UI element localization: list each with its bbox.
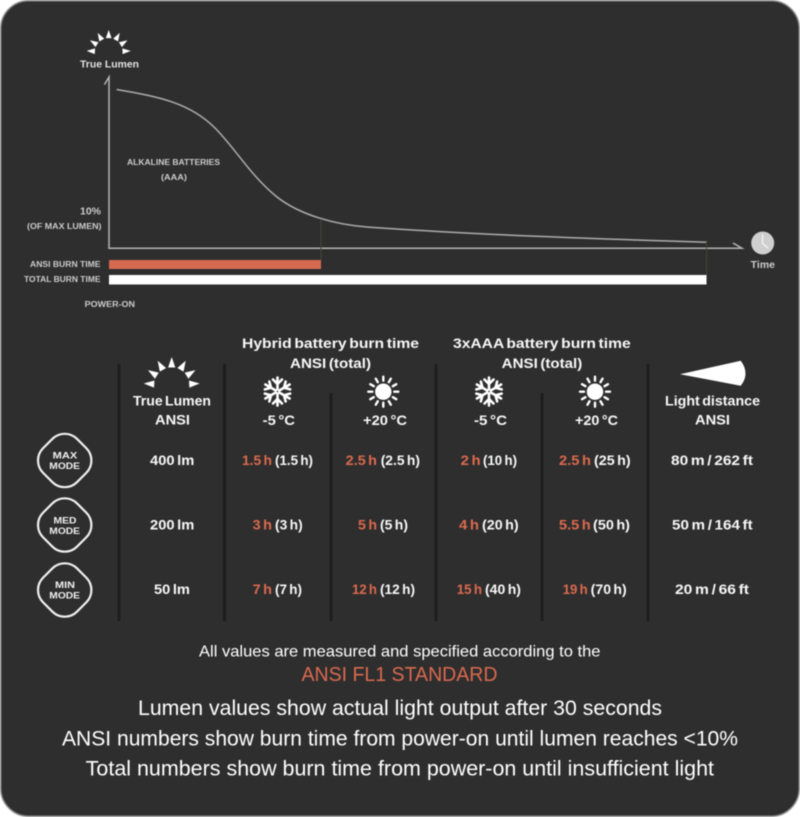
row: med mode values: (50 h) [593, 516, 630, 532]
row: max mode values: 2 h [461, 452, 481, 468]
row: max mode values: 2.5 h [559, 452, 591, 468]
row: med mode values: (5 h) [380, 516, 408, 532]
badge: med mode: MED [54, 516, 77, 526]
row: min mode values: 19 h [563, 581, 588, 597]
row: med mode values: 50 m / 164 ft [672, 516, 753, 532]
icon: snowflake hybrid [263, 378, 292, 406]
heading: hybrid battery: Hybrid battery burn time [242, 335, 419, 351]
row: med mode values: 4 h [459, 516, 479, 532]
badge: med mode [31, 491, 99, 559]
row: max mode values: (25 h) [594, 452, 631, 468]
row: min mode values: 12 h [352, 581, 377, 597]
heading: 3xAAA battery [453, 335, 631, 371]
icon: sun hybrid [368, 377, 398, 407]
row: med mode values: (3 h) [275, 516, 303, 532]
chart label: ten percent: (OF MAX LUMEN) [27, 222, 102, 231]
row: max mode values: (2.5 h) [381, 452, 420, 468]
row: max mode values: 400 lm [150, 452, 194, 468]
y axis label: True Lumen [80, 60, 139, 70]
row: max mode values: 1.5 h [242, 452, 272, 468]
heading: 3xAAA battery: 3xAAA battery burn time [453, 335, 631, 351]
bar: total burn time [109, 275, 706, 284]
row: min mode values: 7 h [253, 581, 272, 597]
column head: hybrid cold: -5 °C [263, 412, 295, 428]
discharge curve [117, 90, 707, 242]
specification table [31, 335, 760, 624]
icon: lumen sun [144, 357, 200, 388]
bar: ansi burn time [109, 260, 321, 269]
row: min mode values: (7 h) [275, 581, 302, 597]
standard name: ANSI FL1 STANDARD [302, 664, 498, 686]
column head: true lumen [133, 392, 211, 428]
badge: min mode: MODE [49, 590, 80, 602]
axes [104, 77, 742, 248]
row: max mode values: (1.5 h) [275, 452, 313, 468]
badge: med mode: MODE [49, 526, 80, 537]
chart label: alkaline batteries: (AAA) [161, 173, 187, 182]
chart label: ten percent: 10% [80, 206, 101, 218]
heading: 3xAAA battery: ANSI (total) [502, 355, 582, 371]
column head: true lumen: True Lumen [133, 392, 211, 408]
label: total burn time: TOTAL BURN TIME [24, 275, 101, 284]
badge: max mode: MAX [53, 451, 78, 462]
column head: light distance: ANSI [695, 412, 730, 428]
column head: light distance [665, 392, 760, 428]
row: min mode values [154, 581, 749, 597]
label: power-on: POWER-ON [85, 300, 135, 309]
column head: 3xAAA cold: -5 °C [474, 412, 507, 428]
row: med mode values: 3 h [253, 516, 272, 532]
x axis label: Time [751, 260, 775, 271]
icon: sun 3xAAA [580, 377, 610, 407]
badge: max mode: MODE [49, 461, 80, 472]
chart label: ten percent [27, 206, 102, 231]
icon: snowflake 3xAAA [475, 378, 503, 406]
row: min mode values: (40 h) [485, 581, 521, 597]
column head: hybrid warm: +20 °C [363, 412, 407, 428]
intro line: All values are measured and specified according to the [199, 644, 601, 660]
badge: min mode [31, 556, 99, 624]
row: med mode values: 5.5 h [559, 516, 591, 532]
row: min mode values: (70 h) [591, 581, 627, 597]
row: max mode values: 2.5 h [346, 452, 377, 468]
icon: light beam [680, 361, 746, 386]
chart label: alkaline batteries: ALKALINE BATTERIES [127, 158, 221, 167]
badge: max mode [31, 427, 99, 494]
note: lumen values: Lumen values show actual light output after 30 seconds [138, 697, 662, 720]
row: max mode values [150, 452, 753, 468]
note: total numbers: Total numbers show burn time from power-on until insufficient light [86, 758, 714, 780]
chart label: alkaline batteries [127, 158, 221, 182]
note: ansi numbers: ANSI numbers show burn time from power-on until lumen reaches <10% [62, 728, 738, 750]
badge: min mode: MIN [55, 580, 75, 591]
heading: hybrid battery [242, 335, 419, 371]
row: min mode values: 50 lm [154, 581, 190, 597]
column head: true lumen: ANSI [155, 412, 190, 428]
row: max mode values: 80 m / 262 ft [671, 452, 753, 468]
column head: light distance: Light distance [665, 392, 760, 408]
guide lines [321, 219, 706, 275]
row: min mode values: 15 h [457, 581, 482, 597]
icon: clock [751, 232, 774, 254]
burn time chart [24, 30, 775, 309]
heading: hybrid battery: ANSI (total) [290, 355, 371, 371]
icon: true lumen sun [86, 30, 131, 54]
row: med mode values: 200 lm [150, 516, 194, 532]
column head: 3xAAA warm: +20 °C [575, 412, 618, 428]
row: med mode values [150, 516, 753, 532]
row: med mode values: (20 h) [482, 516, 519, 532]
row: min mode values: (12 h) [380, 581, 415, 597]
row: max mode values: (10 h) [483, 452, 517, 468]
column dividers [119, 364, 648, 621]
footer notes [62, 644, 738, 780]
row: med mode values: 5 h [358, 516, 377, 532]
row: min mode values: 20 m / 66 ft [675, 581, 749, 597]
label: ansi burn time: ANSI BURN TIME [30, 260, 101, 269]
